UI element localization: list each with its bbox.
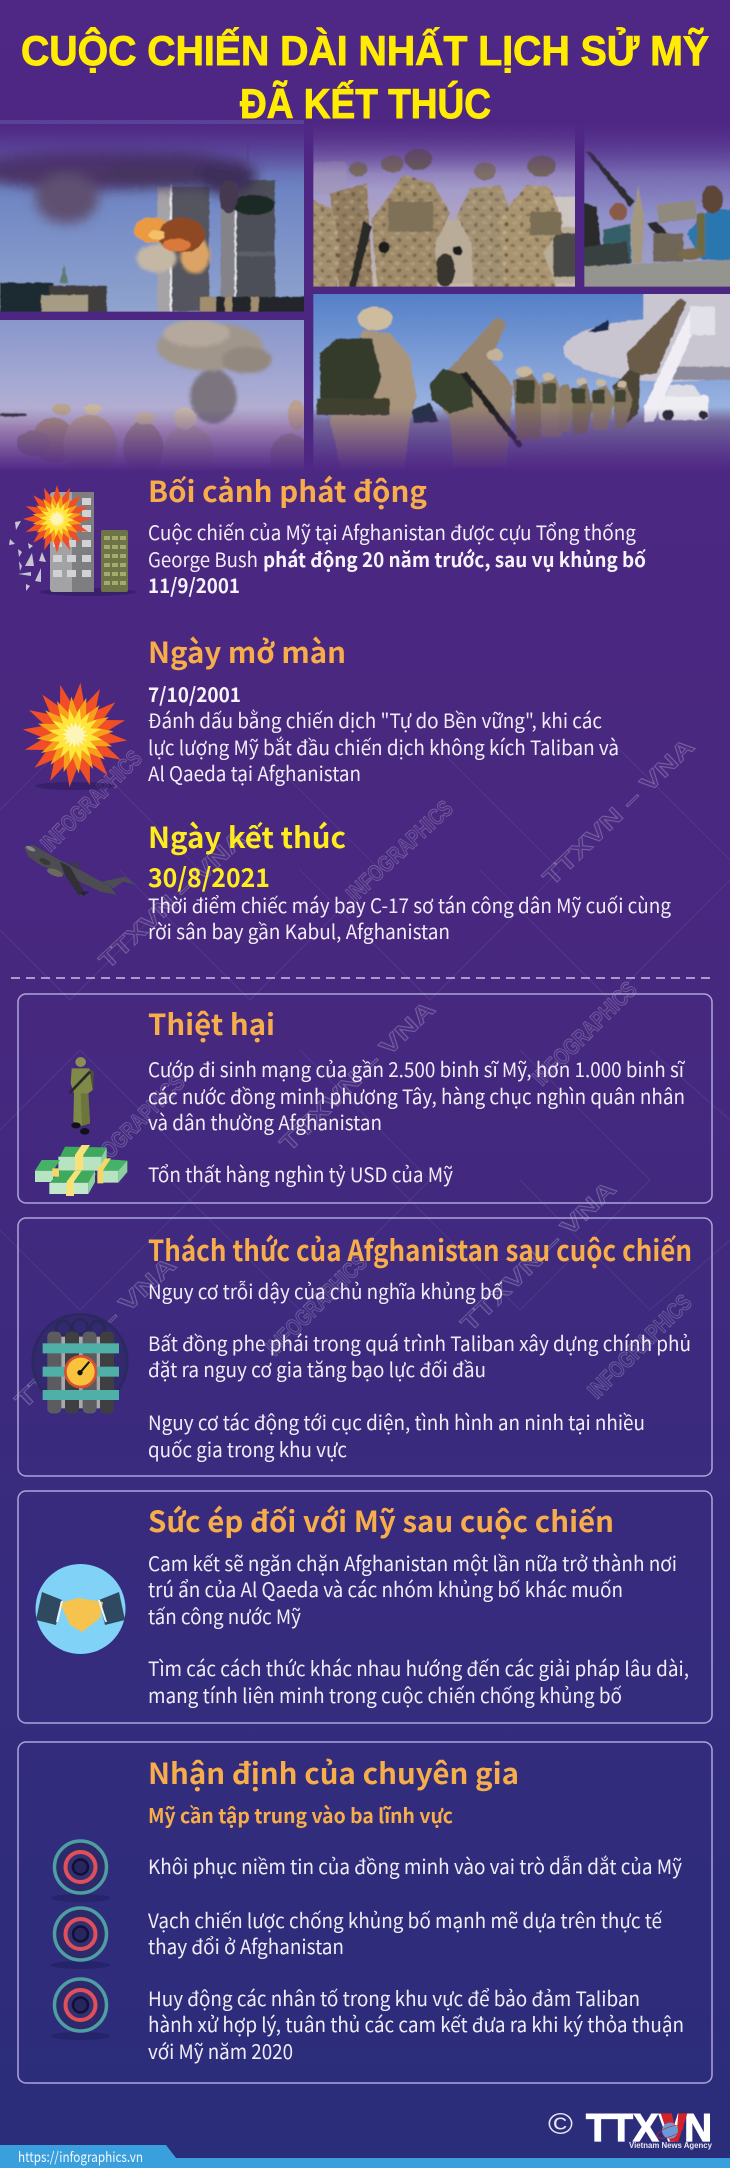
text block: Khôi phục niềm tin của đồng minh vào vai trò dẫn dắt của Mỹ: [148, 1851, 683, 1880]
heading: Ngày mở màn: [148, 630, 346, 672]
text block: Cướp đi sinh mạng của gần 2.500 binh sĩ Mỹ, hơn 1.000 binh sĩ: [148, 1054, 685, 1083]
photo: US soldiers with truck: [313, 133, 575, 287]
panel: Sức ép đối với Mỹ: [18, 1491, 712, 1723]
heading: Thiệt hại: [148, 1002, 275, 1044]
text block: 30/8/2021: [148, 858, 270, 895]
icon: soldier: [69, 1057, 94, 1135]
icon: explosion: [17, 677, 133, 793]
text block: Bất đồng phe phái trong quá trình Taliban xây dựng chính phủ: [148, 1328, 691, 1357]
watermarks: INFOGRAPHICS: [75, 1069, 190, 1184]
photo bottom fade: [0, 408, 730, 471]
section: Ngày mở màn: [17, 630, 619, 793]
icon: time bomb: [33, 1314, 127, 1413]
footer band: https://infographics.vn: [18, 2147, 143, 2167]
text block: với Mỹ năm 2020: [148, 2036, 293, 2065]
text block: [148, 858, 671, 945]
text block: Tìm các cách thức khác nhau hướng đến các giải pháp lâu dài,: [148, 1653, 689, 1682]
photo: twin towers attack: [0, 120, 304, 312]
heading: Sức ép đối với Mỹ sau cuộc chiến: [148, 1499, 614, 1541]
heading: Bối cảnh phát động: [148, 469, 427, 511]
logo: TTXVN: Vietnam News Agency: [629, 2141, 713, 2150]
icon: C-17 plane: [24, 845, 136, 896]
icon: target 2: [50, 1908, 110, 1969]
text block: Đánh dấu bằng chiến dịch "Tự do Bền vững", khi các: [148, 705, 602, 734]
text block: phát động 20 năm trước, sau vụ khủng bố: [263, 544, 646, 573]
watermarks: TTXVN – VNA: [455, 1175, 621, 1337]
text block: [148, 1276, 691, 1463]
text block: quốc gia trong khu vực: [148, 1434, 347, 1463]
text block: [148, 1054, 685, 1188]
panel: Thiệt hại: [18, 994, 712, 1203]
section: Ngày kết thúc: [24, 815, 671, 945]
text block: thay đổi ở Afghanistan: [148, 1931, 344, 1960]
text block: hành xử hợp lý, tuân thủ các cam kết đưa ra khi ký thỏa thuận: [148, 2009, 684, 2038]
text block: George Bush: [148, 544, 258, 573]
icon: target 1: [50, 1841, 110, 1902]
watermarks: [10, 733, 699, 1414]
photo top fade: [0, 124, 730, 174]
watermarks: INFOGRAPHICS: [260, 1249, 372, 1361]
text block: Tổn thất hàng nghìn tỷ USD của Mỹ: [148, 1159, 454, 1188]
panel: Thách thức của Afghanistan: [18, 1218, 712, 1476]
icon: money stacks: [35, 1145, 127, 1196]
text block: lực lượng Mỹ bắt đầu chiến dịch không kích Taliban và: [148, 732, 619, 761]
text block: Cuộc chiến của Mỹ tại Afghanistan được cựu Tổng thống: [148, 517, 636, 546]
watermarks: INFOGRAPHICS: [35, 745, 147, 857]
text block: Al Qaeda tại Afghanistan: [148, 758, 361, 787]
footer band: [0, 2145, 730, 2168]
text block: [148, 1851, 684, 2065]
text block: đặt ra nguy cơ gia tăng bạo lực đối đầu: [148, 1354, 486, 1383]
text block: và dân thường Afghanistan: [148, 1107, 382, 1136]
text block: 11/9/2001: [148, 570, 240, 599]
photo: troops boarding plane: [313, 294, 730, 466]
text block: rời sân bay gần Kabul, Afghanistan: [148, 916, 450, 945]
icon: target 3: [50, 1979, 110, 2040]
heading: Nhận định của chuyên gia: [148, 1751, 519, 1793]
text block: Huy động các nhân tố trong khu vực để bảo đảm Taliban: [148, 1983, 640, 2012]
watermarks: TTXVN – VNA: [537, 733, 699, 891]
photo: explosion and soldiers: [0, 320, 304, 467]
text block: các nước đồng minh phương Tây, hàng chục nghìn quân nhân: [148, 1081, 685, 1110]
logo: TTXVN: ©: [548, 2108, 573, 2141]
watermarks: INFOGRAPHICS: [341, 795, 458, 907]
text block: Vạch chiến lược chống khủng bố mạnh mẽ dựa trên thực tế: [148, 1905, 663, 1934]
text block: [148, 679, 619, 787]
heading: Ngày kết thúc: [148, 815, 346, 857]
section: Bối cảnh phát động: [9, 469, 646, 599]
subheading: Mỹ cần tập trung vào ba lĩnh vực: [148, 1800, 453, 1829]
title: [21, 26, 709, 127]
text block: Nguy cơ tác động tới cục diện, tình hình an ninh tại nhiều: [148, 1407, 645, 1436]
text block: trú ẩn của Al Qaeda và các nhóm khủng bố khác muốn: [148, 1574, 623, 1603]
text block: Nguy cơ trỗi dậy của chủ nghĩa khủng bố: [148, 1276, 503, 1305]
text block: Thời điểm chiếc máy bay C-17 sơ tán công dân Mỹ cuối cùng: [148, 890, 671, 919]
logo: TTXVN: TTXVN: [586, 2107, 712, 2150]
watermarks: TTXVN – VNA: [94, 825, 250, 974]
watermarks: INFOGRAPHICS: [582, 1289, 697, 1404]
watermarks: INFOGRAPHICS: [527, 976, 642, 1091]
text block: [148, 517, 646, 599]
panel: Nhận định của chuyên gia: [18, 1742, 712, 2083]
text block: 7/10/2001: [148, 679, 241, 708]
title: ĐÃ KẾT THÚC: [240, 79, 491, 127]
icon: building with explosion: [9, 485, 136, 596]
watermarks: TTXVN – VNA: [274, 995, 440, 1157]
text block: [148, 1548, 689, 1709]
text block: mang tính liên minh trong cuộc chiến chống khủng bố: [148, 1680, 622, 1709]
photo: Taliban fighters: [584, 135, 730, 287]
text block: Cam kết sẽ ngăn chặn Afghanistan một lần nữa trở thành nơi: [148, 1548, 677, 1577]
photo collage: [0, 110, 730, 482]
icon: handshake: [36, 1564, 126, 1654]
text block: tấn công nước Mỹ: [148, 1601, 302, 1630]
watermarks: TTXVN – VNA: [10, 1251, 181, 1414]
